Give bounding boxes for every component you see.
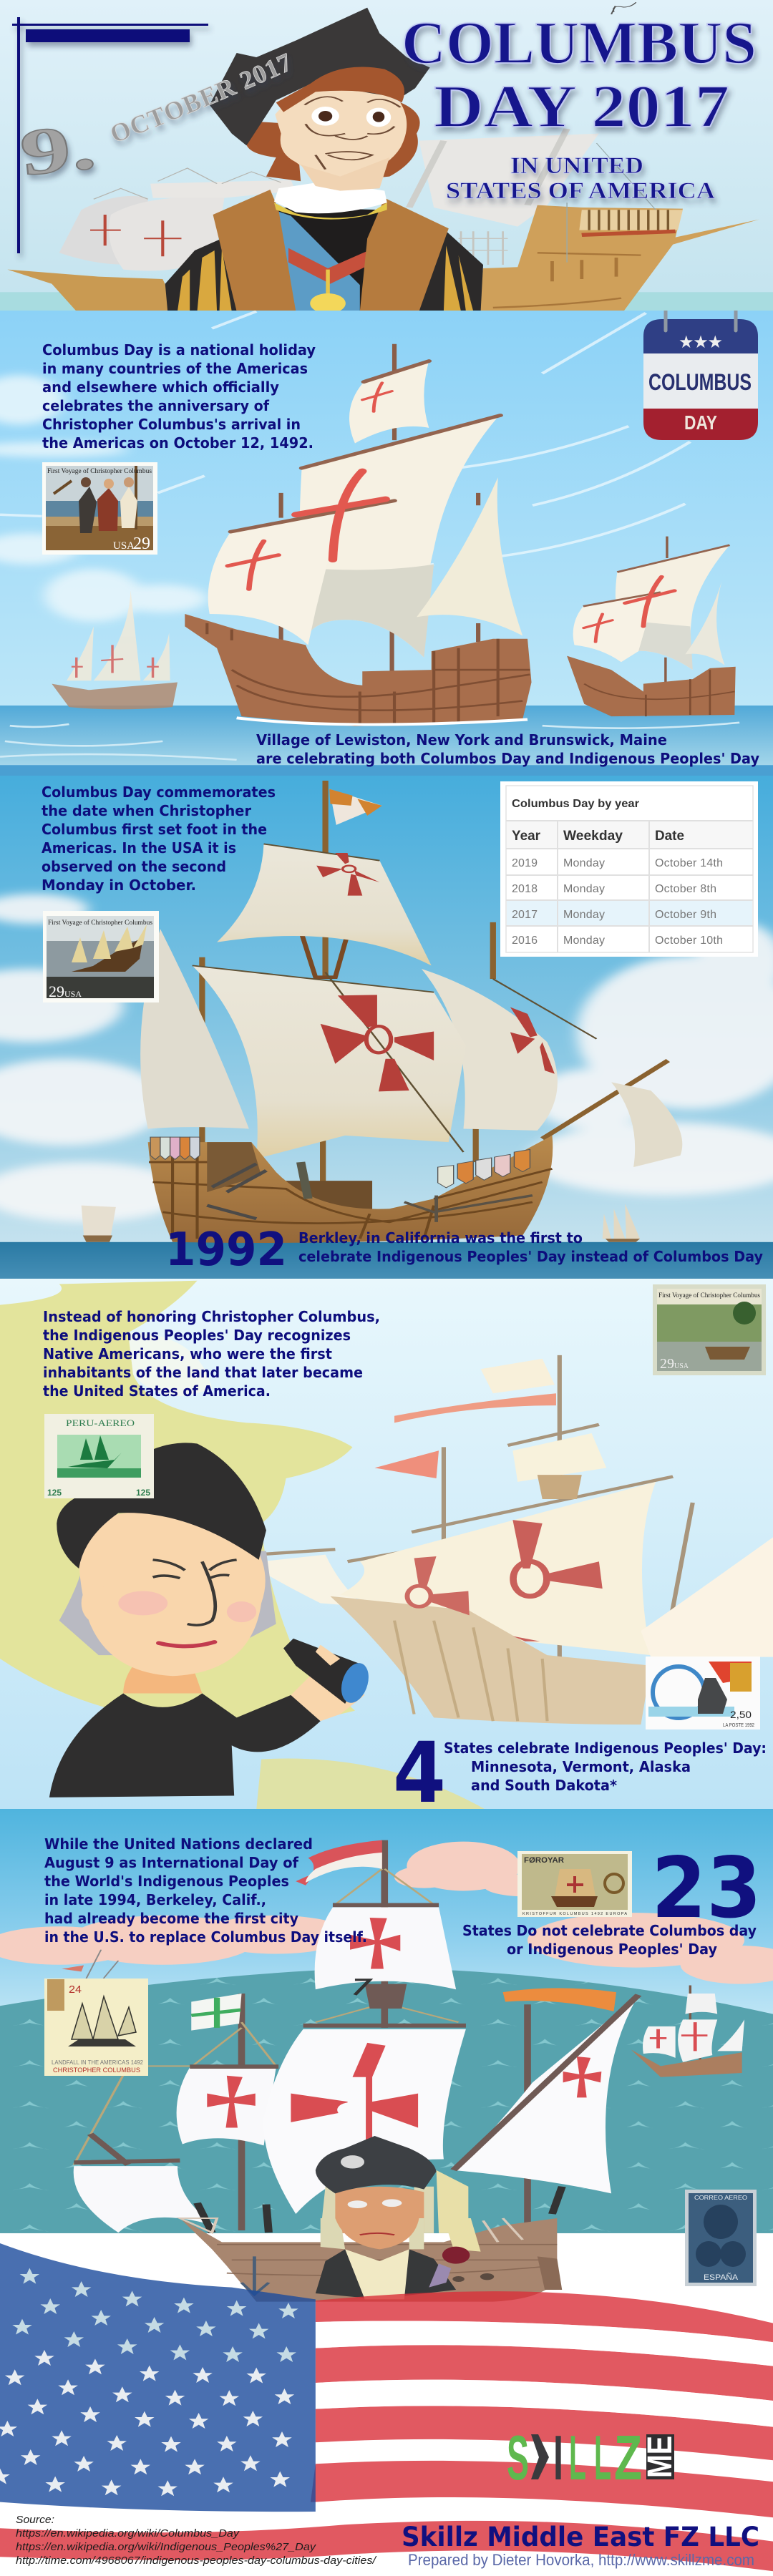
source list: [16, 2514, 377, 2567]
illustration: Santa Maria ship: [140, 781, 682, 1243]
title: DAY 2017: [434, 73, 729, 140]
text block: commemorates: Americas. In the USA it is: [42, 839, 236, 857]
stamp: first voyage, USA 29: [42, 462, 157, 555]
text block: Berkley: celebrate Indigenous Peoples' Day instead of Columbos Day: [298, 1248, 763, 1265]
table: Columbus Day by year: October 14th: [655, 857, 723, 869]
stamp: Christopher Columbus, Landfall in the Americas: CHRISTOPHER COLUMBUS: [53, 2067, 140, 2074]
text block: commemorates: Columbus first set foot in the: [42, 821, 267, 838]
text block: 23 states: or Indigenous Peoples' Day: [507, 1941, 717, 1958]
text block: Indigenous recognition: the United States of America.: [43, 1382, 271, 1400]
source list: Source:: [16, 2514, 54, 2526]
panel: Indigenous Peoples' Day: [0, 1279, 773, 1822]
panel: header: [0, 0, 773, 311]
panel: commemorates: [0, 766, 773, 1289]
table: Columbus Day by year: [500, 781, 758, 957]
illustration: cartoon ship sails: [62, 1840, 744, 2233]
stamp: Peru-Aereo: [44, 1414, 154, 1498]
stamp: Espana: CORREO AEREO: [694, 2195, 747, 2201]
stamp: Espana: ESPAÑA: [704, 2273, 739, 2282]
text block: Indigenous recognition: inhabitants of the land that later became: [43, 1364, 363, 1381]
source list: http://time.com/4968067/indigenous-peoples-day-columbus-day-cities/: [16, 2555, 377, 2567]
text block: national holiday: [42, 341, 316, 452]
stamp: Foroyar: FØROYAR: [524, 1856, 564, 1865]
text block: four states: [444, 1740, 767, 1794]
table: Columbus Day by year: 2016: [512, 935, 538, 947]
text block: United Nations: had already become the first city: [44, 1910, 298, 1927]
table: Columbus Day by year: Monday: [563, 883, 605, 895]
text block: national holiday: the Americas on October 12, 1492.: [42, 434, 313, 452]
text block: Indigenous recognition: Native Americans, who were the first: [43, 1345, 332, 1362]
illustration: faded ship: [256, 1355, 773, 1724]
text block: Lewiston and Brunswick: Village of Lewiston, New York and Brunswick, Maine: [256, 731, 667, 748]
table: Columbus Day by year: Monday: [563, 909, 605, 921]
logo: Skillz Me: Z: [614, 2422, 642, 2493]
text block: commemorates: [42, 784, 276, 894]
stamp: 2,50 La Poste 1992: 2,50: [730, 1709, 752, 1720]
table: Columbus Day by year: October 9th: [655, 909, 716, 921]
credit line: Prepared by Dieter Hovorka, http://www.skillzme.com: [408, 2551, 754, 2569]
stamp: Peru-Aereo: 125: [47, 1488, 62, 1498]
stamp: Foroyar: KRISTOFFUR KOLUMBUS 1492 EUROPA: [522, 1912, 627, 1916]
table: Columbus Day by year: October 10th: [655, 935, 723, 947]
table: Columbus Day by year: Weekday: [563, 829, 623, 844]
stamp: 2,50 La Poste 1992: LA POSTE 1992: [723, 1723, 754, 1728]
text block: Indigenous recognition: Instead of honoring Christopher Columbus,: [43, 1308, 380, 1325]
table: Columbus Day by year: 2017: [512, 909, 538, 921]
stat: 23: 23: [651, 1839, 762, 1937]
logo: Skillz Me: I: [553, 2422, 563, 2493]
illustration: main ship: [185, 344, 532, 726]
table: Columbus Day by year: Monday: [563, 857, 605, 869]
icon: Columbus Day calendar: ★★★: [679, 332, 723, 352]
header illustration background and ships: [0, 0, 773, 313]
company name: Skillz Middle East FZ LLC: [402, 2522, 759, 2552]
stat: 4: 4: [393, 1724, 446, 1822]
text block: Indigenous recognition: the Indigenous Peoples' Day recognizes: [43, 1327, 351, 1344]
subtitle: IN UNITED: [510, 153, 643, 179]
stamp: Espana: [685, 2190, 757, 2286]
decoration: navy corner bars: [12, 17, 208, 253]
date: 9. October 2017: OCTOBER 2017: [110, 53, 288, 149]
text block: United Nations: August 9 as International Day of: [44, 1854, 298, 1871]
logo: Skillz Me: S: [507, 2422, 529, 2493]
stamp: coming ashore, 29 USA: First Voyage of Christopher Columbus: [658, 1292, 761, 1299]
illustration: right ship: [567, 537, 736, 716]
text block: United Nations: While the United Nations declared: [44, 1835, 313, 1853]
text block: commemorates: Monday in October.: [42, 877, 196, 894]
stamp: Foroyar: [517, 1851, 632, 1917]
panel: national holiday: [0, 305, 773, 778]
table: Columbus Day by year: October 8th: [655, 883, 716, 895]
text block: four states: and South Dakota*: [471, 1777, 618, 1794]
subtitle: STATES OF AMERICA: [446, 178, 715, 204]
text block: commemorates: observed on the second: [42, 858, 226, 875]
table: Columbus Day by year: 2018: [512, 883, 538, 895]
table: Columbus Day by year: Monday: [563, 935, 605, 947]
logo: Skillz Me: ME: [641, 2436, 679, 2478]
icon: Columbus Day calendar: [643, 305, 758, 440]
stamp: first voyage, USA 29: USA: [113, 540, 135, 552]
table: Columbus Day by year: Columbus Day by year: [512, 798, 639, 810]
title: COLUMBUS: [402, 9, 757, 77]
sky, clouds and sea background: [0, 1809, 773, 2233]
text block: Lewiston and Brunswick: are celebrating both Columbos Day and Indigenous Peoples' Day: [256, 750, 759, 767]
text block: United Nations: the World's Indigenous Peoples: [44, 1873, 289, 1890]
stamp: crossing the Atlantic, 29 USA: 29USA: [49, 982, 82, 1000]
illustration: Columbus with telescope: [49, 1443, 373, 1797]
icon: Columbus Day calendar: DAY: [684, 411, 717, 434]
logo: Skillz Me: L: [569, 2422, 586, 2493]
stamp: crossing the Atlantic, 29 USA: First Voyage of Christopher Columbus: [48, 919, 153, 926]
text block: United Nations: in the U.S. to replace Columbus Day itself.: [44, 1928, 367, 1946]
source list: https://en.wikipedia.org/wiki/Columbus_Day: [16, 2527, 240, 2540]
text block: national holiday: celebrates the anniversary of: [42, 397, 269, 414]
text block: national holiday: Christopher Columbus's arrival in: [42, 416, 301, 433]
map background: [0, 1279, 773, 1810]
date: 9. October 2017: 9.: [16, 109, 99, 190]
text block: United Nations: in late 1994, Berkeley, Calif.,: [44, 1891, 266, 1908]
illustration: ship hull: [180, 2218, 562, 2302]
text block: national holiday: in many countries of the Americas: [42, 360, 308, 377]
text block: Lewiston and Brunswick: [256, 731, 759, 767]
date: 9. October 2017: [20, 53, 288, 183]
stamp: first voyage, USA 29: 29: [133, 535, 150, 553]
text block: national holiday: Columbus Day is a national holiday: [42, 341, 316, 358]
stat: 1992: 1992: [165, 1224, 287, 1277]
table: Columbus Day by year: Date: [655, 829, 684, 844]
text block: four states: Minnesota, Vermont, Alaska: [471, 1758, 691, 1775]
illustration: Columbus jug portrait: [316, 2136, 481, 2299]
logo: Skillz Me: [507, 2422, 679, 2493]
subtitle: [446, 153, 715, 204]
panel: United Nations and flag: [0, 1809, 773, 2576]
illustration: US flag: [0, 2243, 773, 2576]
stamp: first voyage, USA 29: First Voyage of Christopher Columbus: [47, 467, 152, 474]
stamp: coming ashore, 29 USA: [653, 1284, 766, 1375]
stamp: 2,50 La Poste 1992: [646, 1657, 760, 1729]
text block: Indigenous recognition: [43, 1308, 380, 1400]
stamp: crossing the Atlantic, 29 USA: [43, 911, 159, 1002]
text block: commemorates: Columbus Day commemorates: [42, 784, 276, 801]
sky, clouds and sea background: [0, 766, 773, 1289]
text block: commemorates: the date when Christopher: [42, 802, 251, 819]
stamp: coming ashore, 29 USA: 29USA: [660, 1356, 689, 1372]
table: Columbus Day by year: 2019: [512, 857, 538, 869]
source list: https://en.wikipedia.org/wiki/Indigenous_Peoples%27_Day: [16, 2541, 317, 2553]
illustration: faded small ship: [52, 591, 178, 709]
stamp: Christopher Columbus, Landfall in the Americas: LANDFALL IN THE AMERICAS 1492: [52, 2059, 144, 2066]
table: Columbus Day by year: Year: [512, 829, 541, 844]
stamp: Peru-Aereo: 125: [136, 1488, 150, 1498]
sky, clouds and sea background: [0, 310, 773, 778]
illustration: Columbus portrait: [165, 8, 483, 313]
logo: Skillz Me: L: [594, 2422, 611, 2493]
title: [402, 22, 760, 136]
text block: Berkley: Berkley, in California was the first to: [298, 1229, 583, 1246]
text block: 23 states: States Do not celebrate Columbos day: [462, 1922, 757, 1939]
stamp: Christopher Columbus, Landfall in the Americas: 24: [69, 1984, 82, 1996]
text block: national holiday: and elsewhere which officially: [42, 379, 279, 396]
stamp: Peru-Aereo: PERU-AEREO: [66, 1418, 135, 1428]
text block: Berkley: [298, 1229, 763, 1265]
stamp: Christopher Columbus, Landfall in the Americas: [44, 1979, 148, 2076]
text block: 23 states: [462, 1922, 757, 1958]
text block: United Nations: [44, 1835, 367, 1946]
